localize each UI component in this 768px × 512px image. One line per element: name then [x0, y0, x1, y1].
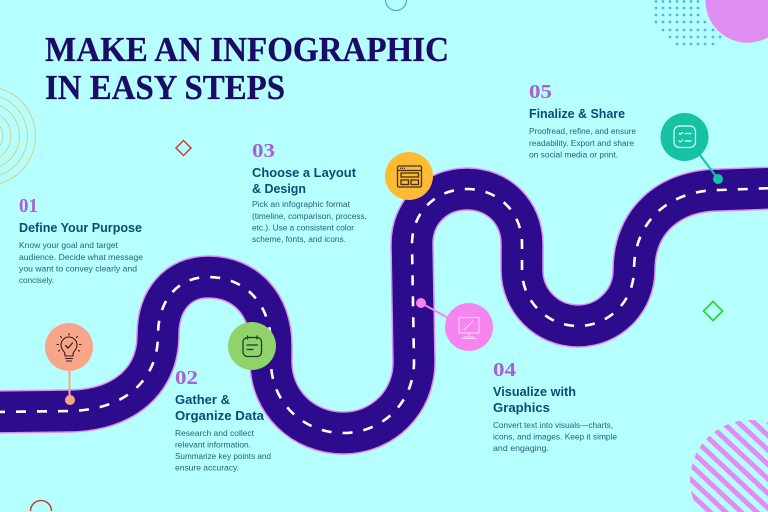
step 2 text: relevant information.	[175, 440, 251, 450]
step 3 text: Choose a Layout	[252, 165, 357, 180]
step 1 text: Define Your Purpose	[19, 220, 142, 235]
step 4 text: and engaging.	[493, 443, 549, 453]
step 2 text	[175, 367, 271, 472]
title: IN EASY STEPS	[45, 69, 285, 107]
title	[45, 31, 449, 107]
icon: light bulb with check	[57, 334, 81, 361]
step 4 text	[493, 359, 617, 453]
decoration: bottom red circle outline	[30, 501, 52, 511]
icon: checklist	[674, 126, 696, 148]
step 4 text: Graphics	[493, 400, 550, 415]
step 3 marker	[385, 152, 433, 200]
step 4 text: Convert text into visuals—charts,	[493, 420, 613, 430]
step 1 marker	[45, 323, 93, 405]
step 3 text: Pick an infographic format	[252, 199, 351, 209]
step 5 text	[529, 81, 636, 160]
step 4 text: 04	[493, 359, 516, 381]
step 2 text: Organize Data	[175, 408, 265, 423]
decoration: dot grid	[655, 0, 721, 45]
step 2 text: Gather &	[175, 392, 230, 407]
step 3 text: etc.). Use a consistent color	[252, 222, 354, 232]
step 2 text: ensure accuracy.	[175, 462, 239, 472]
step 1 text: Know your goal and target	[19, 240, 119, 250]
step 5 text: Finalize & Share	[529, 106, 625, 121]
step 1 text: 01	[19, 195, 38, 217]
decoration: red diamond	[176, 140, 191, 156]
step 1 text: audience. Decide what message	[19, 252, 143, 262]
step 2 text: Summarize key points and	[175, 451, 271, 461]
icon: notepad	[243, 336, 262, 356]
step 5 text: 05	[529, 81, 552, 103]
step 1 text: you want to convey clearly and	[19, 264, 137, 274]
step 1 text: concisely.	[19, 275, 54, 285]
decoration: concentric rings	[0, 86, 36, 186]
step 1 text	[19, 195, 143, 285]
step 4 text: Visualize with	[493, 384, 576, 399]
step 3 text: & Design	[252, 181, 306, 196]
decoration: green diamond	[704, 302, 722, 320]
step 3 text: 03	[252, 140, 275, 162]
step 5 marker	[660, 113, 723, 184]
step 5 text: Proofread, refine, and ensure	[529, 126, 636, 136]
step 4 marker	[416, 298, 493, 351]
step 2 text: Research and collect	[175, 428, 255, 438]
step 3 text: (timeline, comparison, process,	[252, 211, 367, 221]
decoration: top circle outline	[386, 0, 406, 10]
step 2 text: 02	[175, 367, 198, 389]
step 3 text: scheme, fonts, and icons.	[252, 234, 346, 244]
step 5 text: on social media or print.	[529, 150, 618, 160]
step 3 text	[252, 140, 367, 244]
title: MAKE AN INFOGRAPHIC	[45, 31, 449, 69]
decoration: striped circle	[690, 420, 768, 512]
icon: monitor with brush	[459, 318, 479, 338]
step 5 text: readability. Export and share	[529, 138, 634, 148]
icon: layout window	[398, 166, 422, 187]
step 2 marker	[228, 322, 276, 370]
winding road	[0, 188, 768, 433]
decoration: pink circle	[705, 0, 768, 43]
step 4 text: icons, and images. Keep it simple	[493, 432, 617, 442]
